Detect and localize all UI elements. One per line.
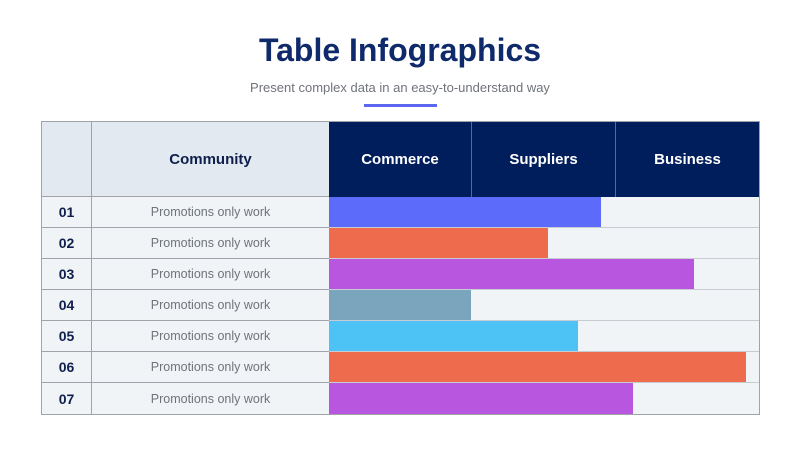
row 07 [59,383,633,414]
row 02: Promotions only work [151,236,270,250]
title: Table Infographics [259,32,541,68]
row 06: Promotions only work [151,360,270,374]
row 06: 06 [59,359,74,375]
row 05: 05 [59,328,74,344]
row 03: Promotions only work [151,267,270,281]
header: Community: Community [169,150,252,168]
header: Commerce [329,122,472,197]
header: number column [42,122,92,197]
header: Commerce: Commerce [361,151,439,168]
header: Community [92,122,329,197]
row 03: 03 [59,266,74,282]
row 05: Promotions only work [151,329,270,343]
table [41,121,760,415]
row 02 [42,228,759,259]
row 04: Promotions only work [151,298,270,312]
row 01: Promotions only work [151,205,270,219]
row 04 [42,290,759,321]
row 04: 04 [59,297,74,313]
accent line [364,104,437,107]
header: Business [616,122,759,197]
row 07: Promotions only work [151,392,270,406]
row 01: 01 [59,204,74,220]
header: Suppliers: Suppliers [509,151,578,168]
header: Business: Business [654,151,721,168]
row 07: 07 [59,390,74,406]
header: Suppliers [472,122,616,197]
row 01 [42,197,759,228]
row 06 [42,352,759,383]
subtitle: Present complex data in an easy-to-understand way [250,80,550,95]
row 05 [42,321,759,352]
row 02: 02 [59,235,74,251]
row 03 [42,259,759,290]
